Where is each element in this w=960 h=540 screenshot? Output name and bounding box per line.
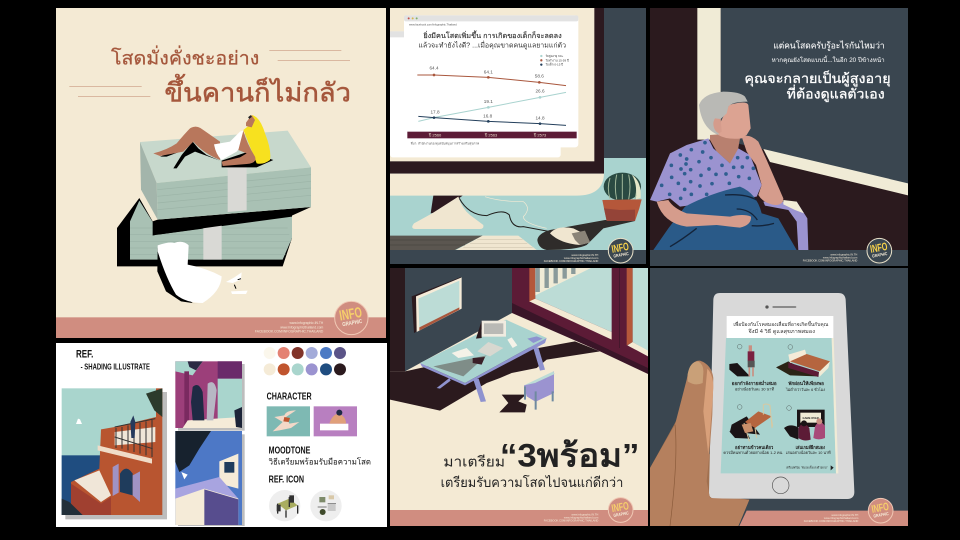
item 1: exercise: อย่างน้อยวันละ 30 นาที [735, 386, 774, 391]
footer text: FACEBOOK.COM/INFOGRAPHIC.THAILAND [255, 329, 324, 333]
logo: GRAPHIC [873, 511, 889, 519]
logo: GRAPHIC [872, 251, 888, 259]
line chart: 16.8 [483, 113, 493, 118]
footer text: FACEBOOK.COM/INFOGRAPHIC.THAILAND [544, 259, 598, 263]
heading: ที่ต้องดูแลตัวเอง [787, 85, 885, 103]
screen header: เพื่อป้องกันโรคสมองเสื่อมที่อาจเกิดขึ้นกับคุณ [733, 319, 829, 328]
heading: moodtone: วิธีเตรียมพร้อมรับมือความโสด [268, 457, 371, 467]
logo [868, 498, 893, 523]
window light [697, 8, 908, 195]
tablet home button [772, 477, 789, 494]
illustration: discarded dress and shoes [157, 242, 248, 304]
character reference: swimmer [267, 406, 310, 436]
panel: room with desk [390, 268, 648, 526]
character reference: sunbather [314, 406, 357, 436]
title: wealthy single: ขึ้นคานก็ไม่กลัว [164, 73, 351, 107]
wall [405, 268, 512, 371]
screen edge [832, 338, 838, 473]
footer text [544, 253, 599, 263]
item 4: brain games: เล่นอย่างน้อยวันละ 10 นาที [786, 450, 831, 455]
wall [603, 8, 646, 158]
panel: elderly person at window [650, 8, 908, 266]
illustration: lower money stack [117, 198, 292, 266]
logo: INFO [338, 305, 363, 325]
item 2: sleep: พักผ่อนให้เพียงพอ [787, 380, 824, 386]
tablet camera and speaker [765, 305, 796, 309]
line chart: 19.1 [484, 99, 493, 104]
logo: GRAPHIC [342, 319, 363, 328]
colour palette [264, 347, 346, 375]
footer band [390, 510, 648, 526]
footer text: www.infographicthailand.com [564, 515, 599, 519]
footer text: www.infographicthailand.com [280, 325, 324, 329]
item 1: exercise: ออกกำลังกายสม่ำเสมอ [732, 380, 777, 386]
screen header: จึงมี 4 วิธี ดูแลสุขภาพสมอง [748, 328, 816, 335]
thumb and hand front [650, 361, 749, 526]
chart source: ที่มา: สำนักงานกองทุนสนับสนุนการสร้างเสริมสุขภาพ [411, 142, 479, 147]
line chart: 17.8 [430, 110, 440, 115]
monitor [390, 8, 604, 196]
footer band [56, 317, 386, 338]
footer band [390, 250, 646, 264]
footer text [544, 512, 599, 522]
footer text: www.infographic.IN.TH [830, 252, 857, 256]
panel: tablet in hand [650, 268, 908, 526]
monitor stand [412, 196, 483, 229]
heading [744, 41, 891, 103]
chart year bar: ปี 2563 [484, 133, 498, 138]
wall [721, 8, 908, 185]
footer text: FACEBOOK.COM/INFOGRAPHIC.THAILAND [803, 258, 857, 262]
title: wealthy single: โสดมั่งคั่งชะอย่าง [111, 46, 259, 69]
logo [335, 301, 368, 335]
footer text: www.infographic.IN.TH [831, 513, 858, 517]
tablet body [709, 293, 854, 499]
logo: INFO [611, 241, 630, 256]
footer band [739, 511, 908, 526]
chart legend: วัยเด็ก 0-15 ปี [545, 61, 563, 67]
line chart: 58.6 [535, 73, 544, 78]
heading: คุณจะกลายเป็นผู้สูงอายุ [744, 69, 891, 87]
logo [608, 498, 633, 522]
screen footer note [786, 464, 834, 470]
heading: three readiness [441, 437, 639, 490]
chart title [418, 29, 566, 49]
window frame [512, 268, 648, 374]
chart title: แล้วจะทำยังไงดี? ...เมื่อคุณขาดคนดูแลยามแก่ตัว [418, 40, 566, 49]
reference: balcony illustration [62, 388, 167, 519]
title: wealthy single [69, 46, 351, 107]
screen footer note: เตรียมพร้อม "สมองแข็งแรงด้วยเกม" [786, 464, 828, 470]
heading: ref: REF. [76, 348, 93, 360]
icon: cactus [602, 173, 642, 221]
item 4: brain games: เล่นเกมส์ฝึกสมอง [796, 444, 826, 450]
chart legend: วัยทำงาน 15-59 ปี [545, 58, 569, 62]
logo: INFO [869, 241, 889, 256]
chair [499, 371, 555, 412]
heading: แต่คนโสดครับรู้อะไรกันไหมว่า [773, 41, 885, 52]
elderly person [650, 92, 797, 250]
line chart [417, 66, 566, 125]
logo: INFO [871, 501, 890, 516]
item 2: sleep: ไม่ต่ำกว่าวันละ 6 ชั่วโมง [785, 387, 825, 392]
footer text [803, 252, 858, 262]
logo: GRAPHIC [613, 510, 629, 518]
heading: ref: - SHADING ILLUSTRATE [81, 361, 150, 371]
illustration: sunbathing woman [153, 115, 273, 168]
footer text: www.infographicthailand.com [823, 255, 858, 259]
footer text [804, 513, 859, 523]
heading: ref icon: REF. ICON [269, 475, 304, 486]
screen header [727, 316, 833, 338]
item 3: eat together [723, 404, 783, 455]
heading: ref [76, 348, 150, 371]
footer text: www.infographic.IN.TH [289, 321, 324, 325]
heading: moodtone: MOODTONE [269, 445, 310, 456]
illustration: upper money stack [140, 131, 311, 235]
tablet screen [721, 338, 836, 473]
desk [420, 320, 547, 402]
chart year bar [407, 132, 577, 138]
chart legend [540, 54, 569, 67]
footer text: FACEBOOK.COM/INFOGRAPHIC.THAILAND [544, 518, 598, 522]
line chart: 64.4 [429, 66, 439, 71]
footer band [650, 250, 908, 266]
icon: shelf reference [310, 490, 342, 521]
line chart: 14.8 [535, 116, 545, 121]
line chart: 64.1 [484, 69, 493, 74]
item 3: eat together: อย่าทานข้าวคนเดียว [735, 444, 774, 450]
hand palm [650, 408, 749, 526]
reference: blue sky illustration [175, 431, 245, 526]
item 4: brain games [784, 406, 831, 455]
chart window: www.facebook.com/Infographic.Thailand [409, 22, 457, 26]
reference: businessmen illustration [175, 361, 245, 431]
footer text: www.infographicthailand.com [824, 516, 859, 520]
footer text: www.infographic.IN.TH [571, 512, 598, 516]
logo [608, 238, 633, 263]
heading: moodtone [268, 445, 371, 467]
logo: GRAPHIC [613, 251, 629, 259]
item 3: eat together: ควรมีคนทานด้วยอย่างน้อย 1-2 คน [723, 450, 783, 455]
chart year bar: ปี 2560 [428, 133, 442, 138]
chair [763, 200, 808, 250]
panel: moodboard references [56, 343, 387, 527]
chart window [404, 15, 578, 147]
footer text: FACEBOOK.COM/INFOGRAPHIC.THAILAND [804, 519, 858, 523]
footer text: www.infographic.IN.TH [571, 253, 598, 257]
chart legend: วัยสูงอายุ 60+ [545, 54, 563, 59]
chart year bar: ปี 2573 [533, 133, 547, 138]
item 1: exercise [729, 344, 777, 391]
panel: money stack cover [56, 8, 386, 338]
heading: character: CHARACTER [267, 391, 312, 402]
footer text [255, 321, 324, 333]
panel: computer desk with chart [390, 8, 646, 264]
icon: table reference [269, 490, 300, 521]
heading: three readiness: เตรียมรับความโสดไปจนแก่ดีกว่า [441, 475, 623, 490]
logo [867, 238, 892, 263]
floor shadow [390, 268, 600, 411]
heading: three readiness: มาเตรียม [443, 453, 505, 469]
heading: หากคุณยังโสดแบบนี้...ในอีก 20 ปีข้างหน้า [772, 54, 885, 64]
mouse and shadow [459, 197, 635, 250]
item 4: brain games: GAME OVER [803, 416, 819, 420]
line chart: 26.6 [535, 89, 545, 94]
heading: three readiness: “3พร้อม” [500, 437, 639, 473]
item 2: sleep [776, 345, 830, 392]
logo: INFO [611, 500, 630, 515]
footer text: www.infographicthailand.com [564, 256, 599, 260]
keyboard [390, 236, 537, 250]
chart title: ยิ่งมีคนโสดเพิ่มขึ้น การเกิดของเด็กก็จะลดลง [423, 29, 562, 40]
browser window behind [390, 31, 561, 157]
wall picture [412, 277, 462, 333]
